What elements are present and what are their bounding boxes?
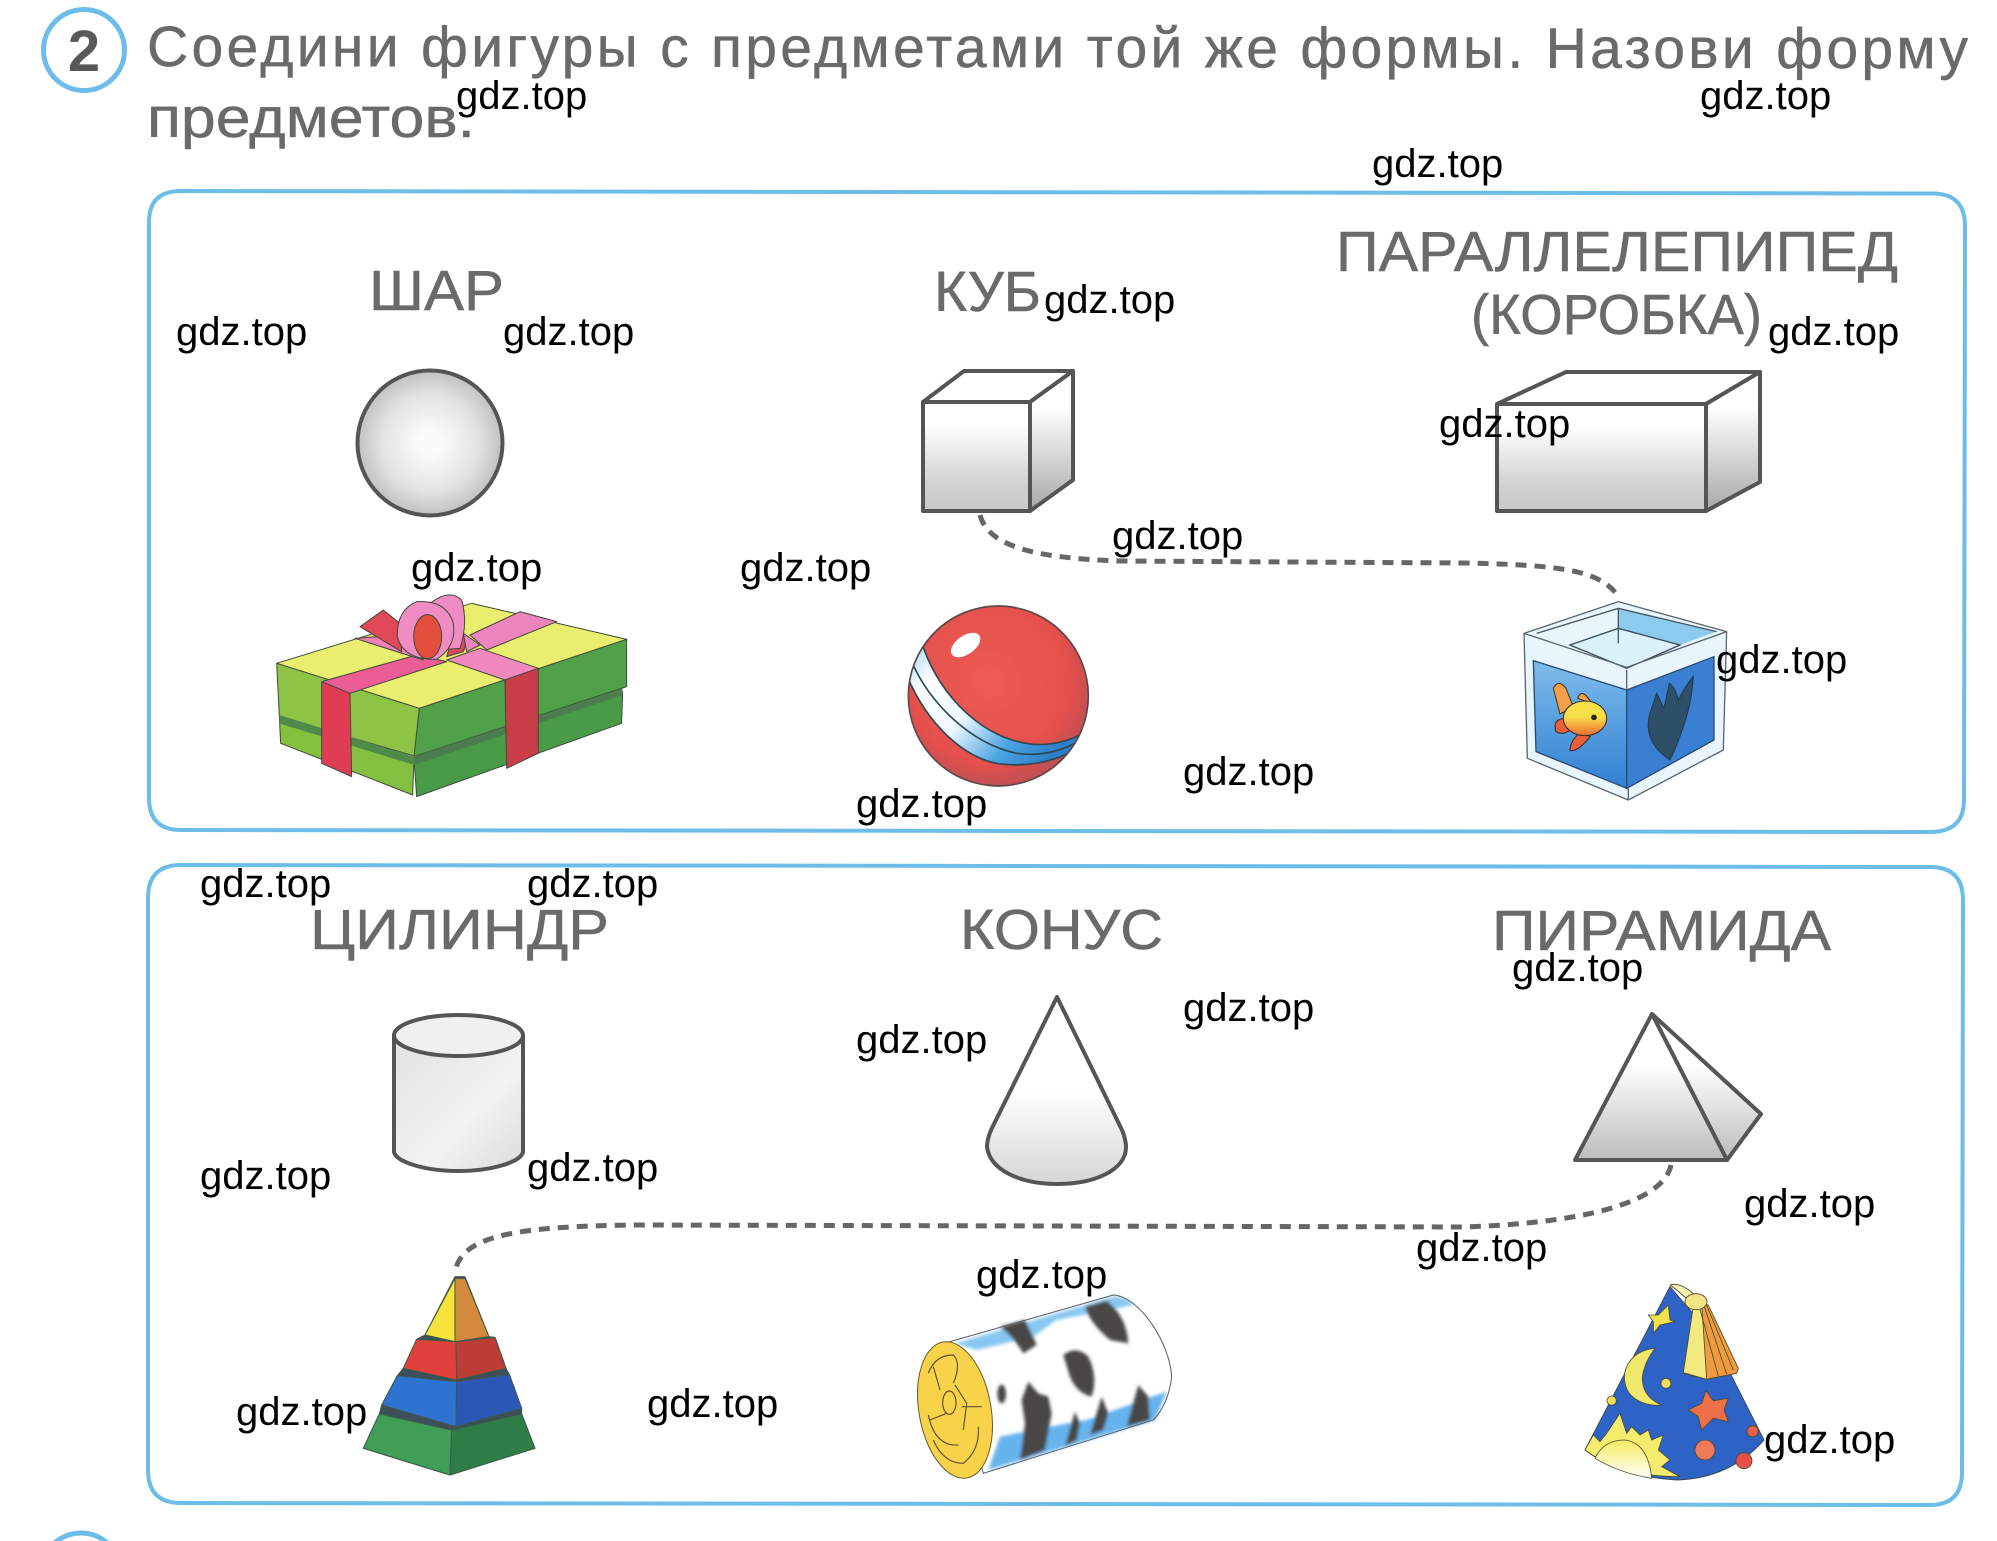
label: ПАРАЛЛЕЛЕПИПЕД (КОРОБКА): ПАРАЛЛЕЛЕПИПЕД — [1336, 220, 1898, 284]
watermark overlay: gdz.top — [176, 310, 307, 354]
watermark overlay: gdz.top — [200, 862, 331, 906]
watermark overlay: gdz.top — [1183, 750, 1314, 794]
watermark overlay: gdz.top — [1764, 1418, 1895, 1462]
connector: cube to aquarium — [980, 515, 1618, 596]
object: party hat — [1585, 1284, 1764, 1480]
watermark overlay: gdz.top — [856, 1018, 987, 1062]
title: task instruction — [147, 15, 1969, 150]
watermark overlay: gdz.top — [856, 782, 987, 826]
task number badge — [44, 10, 124, 90]
label: ПИРАМИДА: ПИРАМИДА — [1492, 899, 1831, 963]
watermark overlay: gdz.top — [456, 74, 587, 118]
watermark overlay: gdz.top — [976, 1253, 1107, 1297]
star top — [1648, 1305, 1675, 1333]
object: aquarium with fish — [1524, 602, 1727, 800]
watermark overlay: gdz.top — [1768, 310, 1899, 354]
title: task instruction: предметов. — [147, 86, 475, 150]
sun — [1585, 1413, 1680, 1477]
watermark overlay: gdz.top — [1112, 514, 1243, 558]
watermark overlay: gdz.top — [411, 546, 542, 590]
watermark overlay: gdz.top — [503, 310, 634, 354]
watermark overlay: gdz.top — [1700, 74, 1831, 118]
object: toy pyramid — [363, 1277, 535, 1475]
tassel — [1683, 1302, 1738, 1379]
label: КОНУС: КОНУС — [960, 898, 1163, 962]
watermark overlay: gdz.top — [1044, 278, 1175, 322]
shape: sphere — [358, 370, 502, 516]
connector: pyramid shape to toy pyramid — [456, 1165, 1671, 1268]
watermark overlay: gdz.top — [1183, 986, 1314, 1030]
label: ПАРАЛЛЕЛЕПИПЕД (КОРОБКА) — [1336, 220, 1898, 347]
shape: rectangular box — [1497, 372, 1760, 511]
watermark overlay: gdz.top — [527, 862, 658, 906]
water plant — [1648, 676, 1693, 760]
shape: pyramid — [1575, 1014, 1761, 1160]
watermark overlay: gdz.top — [1512, 946, 1643, 990]
watermark overlay — [176, 74, 1899, 1462]
watermark overlay: gdz.top — [527, 1146, 658, 1190]
watermark overlay: gdz.top — [1416, 1226, 1547, 1270]
watermark overlay: gdz.top — [647, 1382, 778, 1426]
label: ЦИЛИНДР: ЦИЛИНДР — [310, 898, 609, 962]
panel: bottom shapes — [148, 865, 1963, 1505]
watermark overlay: gdz.top — [1744, 1182, 1875, 1226]
fish — [1553, 683, 1607, 751]
moon — [1624, 1348, 1662, 1405]
watermark overlay: gdz.top — [236, 1390, 367, 1434]
next task number badge (cut off) — [41, 1533, 121, 1541]
object: gift box — [277, 595, 627, 797]
object: birch log — [908, 1295, 1172, 1484]
star orange — [1688, 1391, 1728, 1430]
panel: top shapes — [149, 191, 1965, 832]
watermark overlay: gdz.top — [1439, 402, 1570, 446]
label: ПАРАЛЛЕЛЕПИПЕД (КОРОБКА): (КОРОБКА) — [1471, 283, 1762, 347]
watermark overlay: gdz.top — [200, 1154, 331, 1198]
title: task instruction: Соедини фигуры с предметами той же формы. Назови форму — [147, 15, 1969, 81]
watermark overlay: gdz.top — [1716, 638, 1847, 682]
label: ШАР: ШАР — [369, 259, 504, 323]
watermark overlay: gdz.top — [1372, 142, 1503, 186]
label: КУБ: КУБ — [934, 260, 1041, 324]
shape: cone — [987, 997, 1126, 1184]
shape: cylinder — [394, 1015, 523, 1171]
watermark overlay: gdz.top — [740, 546, 871, 590]
object: ball — [907, 606, 1088, 786]
task number badge: 2 — [68, 19, 100, 84]
shape: cube — [923, 371, 1073, 511]
